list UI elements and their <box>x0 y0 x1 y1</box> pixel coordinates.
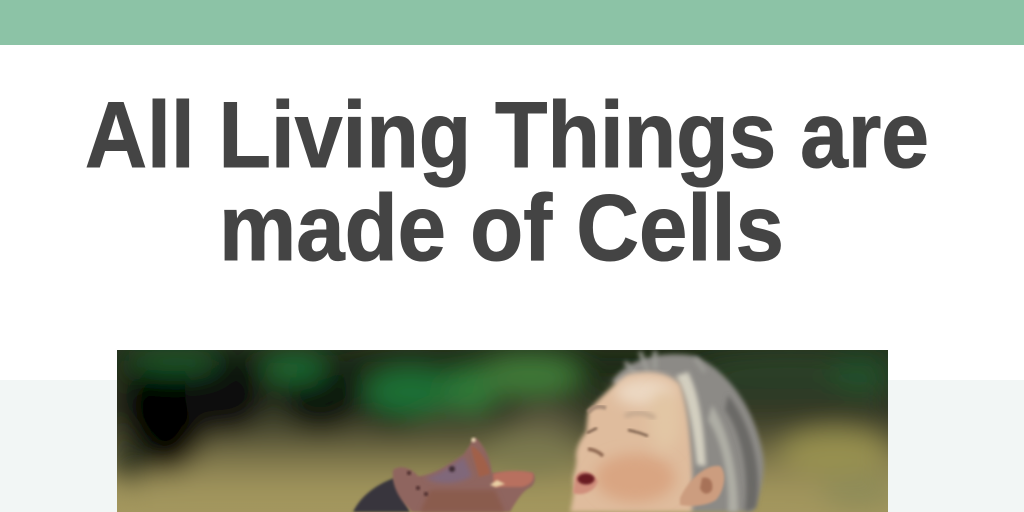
chimpanzee head <box>353 438 535 512</box>
title <box>85 82 929 280</box>
blurred forest background <box>112 350 900 512</box>
title: All Living Things are <box>85 82 929 187</box>
title: made of Cells <box>219 175 784 280</box>
woman: face <box>570 372 692 512</box>
mouth <box>573 471 598 494</box>
top green bar <box>0 0 1024 45</box>
eye lid and brow <box>628 430 648 436</box>
lower pale background panel <box>0 380 1024 512</box>
photo: woman and chimpanzee <box>112 350 900 512</box>
woman: hair <box>612 351 764 512</box>
woman: ear <box>680 466 724 506</box>
